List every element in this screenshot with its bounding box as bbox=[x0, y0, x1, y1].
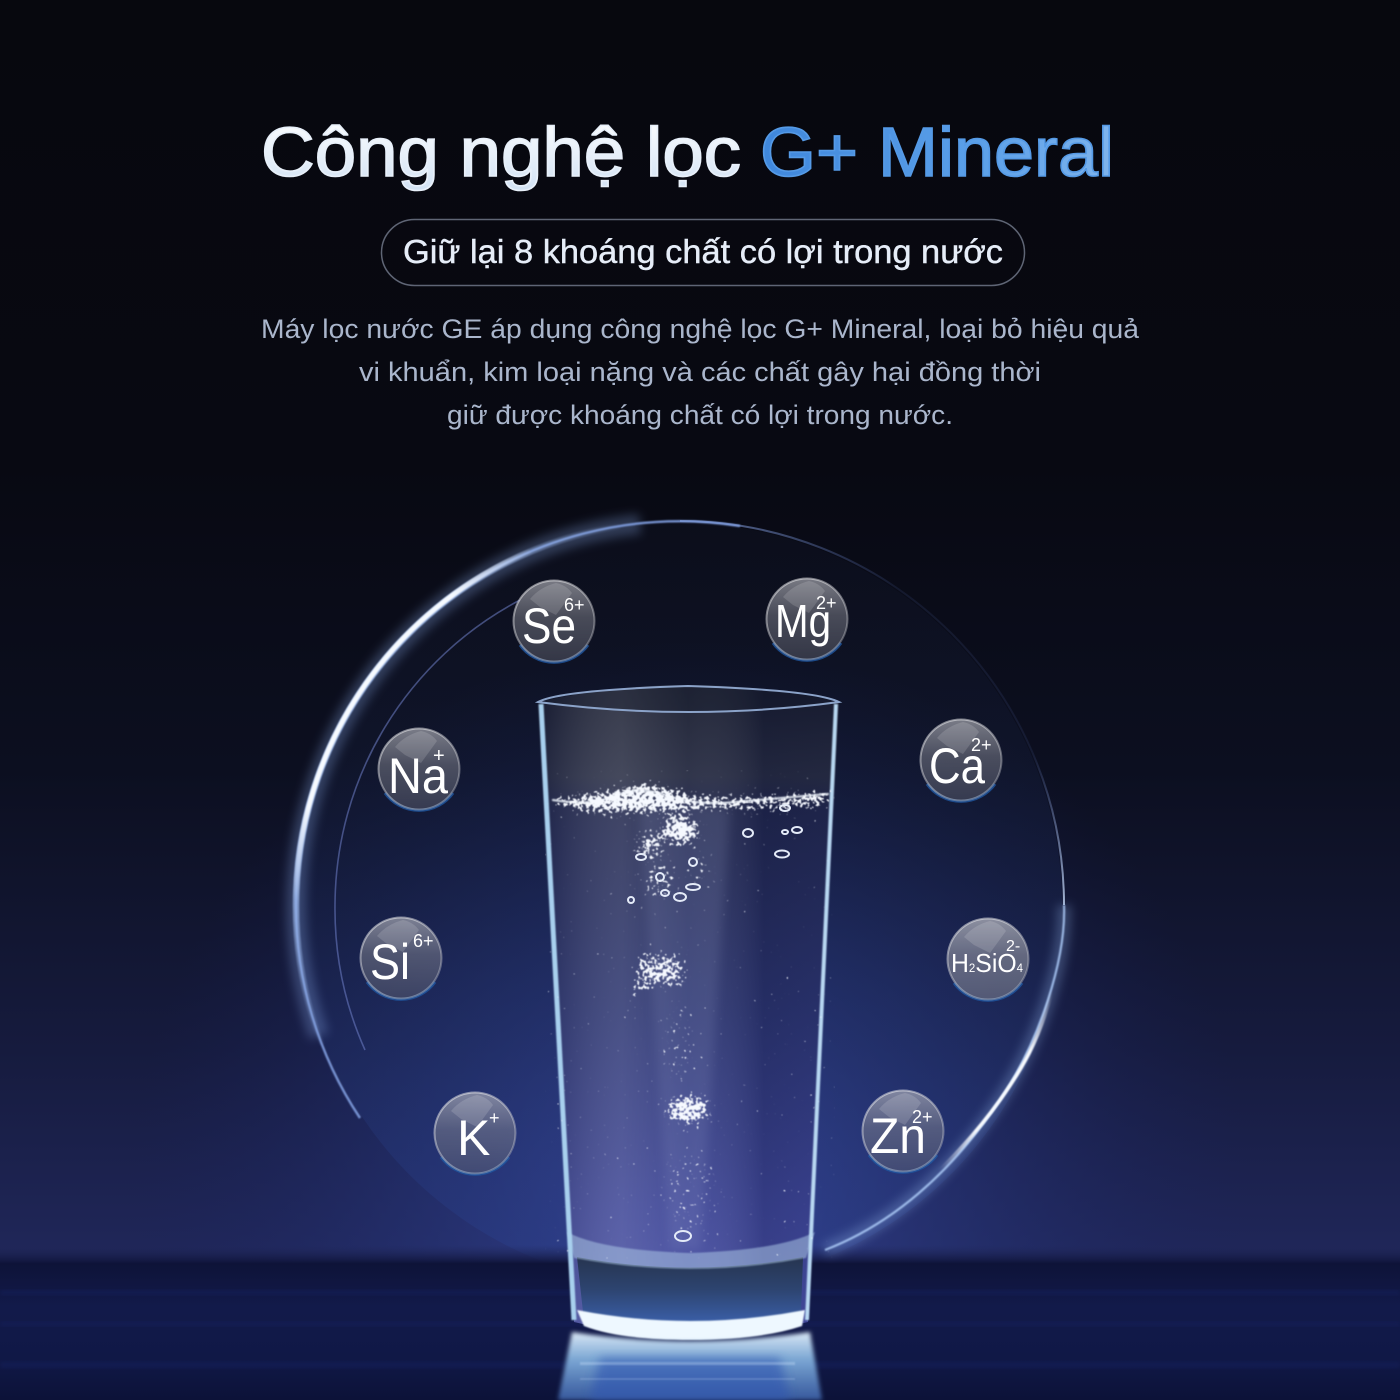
title bbox=[261, 113, 1114, 191]
mineral: Zn bbox=[862, 1090, 944, 1172]
mineral: H2SiO4: H2SiO4 bbox=[951, 948, 1023, 978]
title: Công nghệ lọc bbox=[261, 113, 741, 191]
mineral: K bbox=[434, 1092, 516, 1174]
glass: rim bbox=[538, 686, 839, 712]
mineral: K: + bbox=[489, 1108, 500, 1128]
description: vi khuẩn, kim loại nặng và các chất gây hại đồng thời bbox=[359, 357, 1041, 387]
mineral: Si bbox=[360, 917, 442, 999]
mineral: Na: + bbox=[433, 745, 445, 767]
mineral: Ca bbox=[920, 719, 1002, 801]
description bbox=[261, 314, 1140, 430]
mineral: Se: Se bbox=[522, 598, 576, 654]
glass: center column of bubbles glow bbox=[640, 802, 730, 1250]
foam and bubble clusters bbox=[553, 785, 828, 1230]
glass: thick base bbox=[577, 1257, 803, 1322]
mineral: Na bbox=[378, 728, 460, 810]
subtitle pill: Giữ lại 8 khoáng chất có lợi trong nước bbox=[403, 233, 1003, 270]
mineral: Mg bbox=[766, 578, 848, 660]
mineral: H2SiO4: 2- bbox=[1006, 938, 1020, 955]
water surface bbox=[553, 791, 828, 803]
glass: right wall bbox=[807, 704, 836, 1320]
glass: water floor edge bbox=[567, 1232, 815, 1269]
light ring bbox=[296, 521, 1064, 1250]
mineral: Mg: Mg bbox=[775, 595, 831, 647]
glass: bottom bright band bbox=[577, 1310, 805, 1340]
mineral: Ca: 2+ bbox=[971, 735, 992, 755]
mineral: Zn: 2+ bbox=[912, 1107, 933, 1127]
mineral: Si: 6+ bbox=[413, 931, 434, 951]
description: giữ được khoáng chất có lợi trong nước. bbox=[447, 400, 953, 430]
mineral: K: K bbox=[457, 1110, 490, 1166]
mineral: Zn: Zn bbox=[870, 1108, 926, 1164]
glass: highlight bbox=[538, 685, 839, 1336]
mineral: H2SiO4 bbox=[947, 918, 1029, 1000]
glass: left wall bbox=[541, 704, 574, 1320]
glass: body bbox=[538, 685, 839, 1336]
mineral: Ca: Ca bbox=[929, 738, 985, 794]
mineral: Se: 6+ bbox=[564, 595, 585, 615]
glass bbox=[538, 685, 839, 1340]
description: Máy lọc nước GE áp dụng công nghệ lọc G+ Mineral, loại bỏ hiệu quả bbox=[261, 314, 1140, 344]
subtitle pill bbox=[382, 220, 1024, 286]
bubbles bbox=[628, 805, 802, 1241]
glass reflection on floor bbox=[558, 1332, 822, 1400]
mineral: Mg: 2+ bbox=[816, 593, 837, 613]
mineral: Si: Si bbox=[370, 934, 410, 990]
title: G+ Mineral bbox=[760, 113, 1114, 191]
mineral: Se bbox=[513, 580, 595, 662]
mineral: Na: Na bbox=[388, 748, 448, 804]
